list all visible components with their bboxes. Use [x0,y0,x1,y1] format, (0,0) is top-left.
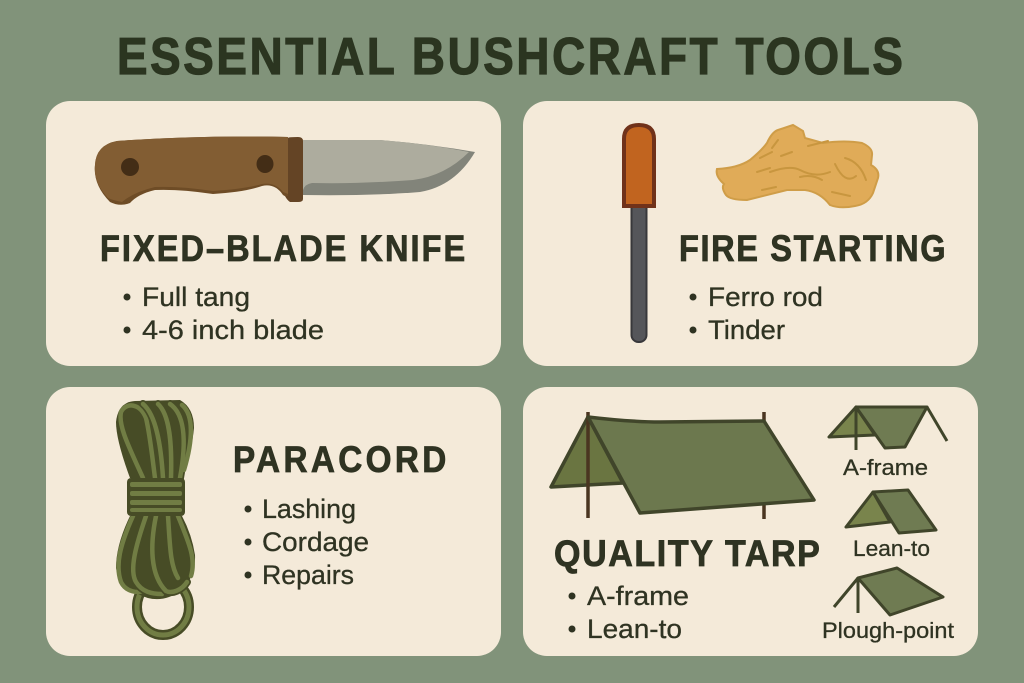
title: ESSENTIAL BUSHCRAFT TOOLS [117,28,903,86]
label: a-frame: A-frame [843,455,928,480]
label: plough-point: Plough-point [822,618,954,643]
icon: large tarp [551,412,814,519]
list: knife: 4-6 inch blade [142,315,324,345]
icon: a-frame tarp [829,407,947,450]
heading: paracord: PARACORD [233,439,446,480]
icon: tinder [717,125,878,207]
list: paracord [244,494,369,590]
heading: quality tarp: QUALITY TARP [554,533,820,574]
list: knife: Full tang [142,282,250,312]
icon: lean-to tarp [846,490,936,533]
list: fire starting: Ferro rod [708,282,823,312]
label: lean-to: Lean-to [853,536,930,561]
icon: plough-point tarp [834,568,943,615]
list: fire starting: Tinder [708,315,785,345]
list: paracord: Repairs [262,560,354,590]
icon: ferro rod [624,125,654,342]
list: knife [124,282,324,345]
list: paracord: Lashing [262,494,356,524]
heading: fire starting: FIRE STARTING [679,228,946,269]
icon: knife [95,136,475,205]
panel: fixed-blade knife [46,101,501,366]
list: paracord: Cordage [262,527,369,557]
panel: fire starting [523,101,978,366]
panel: quality tarp [523,387,978,656]
list: tarp: A-frame [587,581,689,611]
heading: knife: FIXED–BLADE KNIFE [100,228,465,269]
list: tarp: Lean-to [587,614,682,644]
icon: paracord coil [116,400,195,635]
list: fire starting [690,282,823,345]
list: tarp [568,581,689,644]
panel: paracord [46,387,501,656]
